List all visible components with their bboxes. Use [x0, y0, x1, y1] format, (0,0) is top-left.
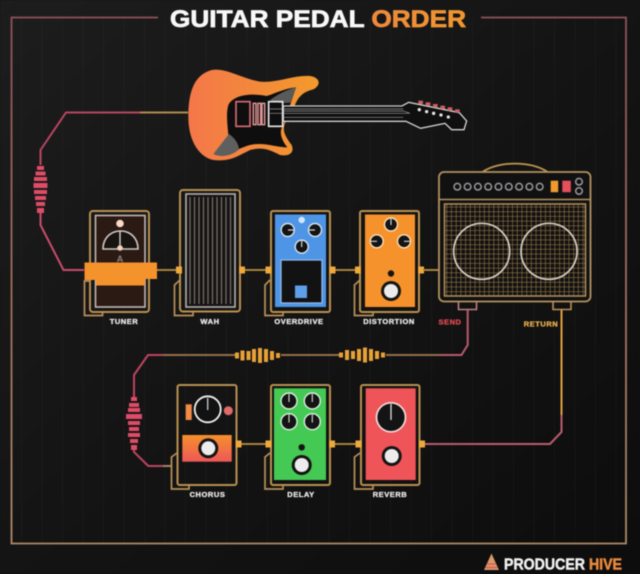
wah bracket — [174, 280, 193, 316]
distortion knob marks — [371, 219, 410, 241]
cable wave: guitar cable — [34, 166, 48, 213]
cable wave: send left — [235, 348, 280, 363]
amp control divider — [440, 198, 590, 200]
cable: reverb to return — [424, 310, 562, 444]
chorus knob mark — [207, 398, 209, 410]
tuner bracket — [84, 281, 102, 316]
pedal: wah — [174, 190, 240, 316]
tuner needle — [119, 231, 121, 248]
chorus knob — [195, 396, 221, 422]
connector: delay to reverb — [333, 443, 358, 445]
distortion knobs — [370, 218, 410, 248]
connector: wah to overdrive — [242, 269, 268, 271]
chorus led — [224, 406, 233, 415]
guitar plate top — [270, 87, 296, 103]
reverb casing — [361, 385, 420, 485]
connectors row two — [236, 440, 425, 448]
amp knobs — [454, 178, 582, 194]
delay body — [274, 388, 326, 480]
tuner led — [116, 220, 124, 227]
connectors row one — [176, 266, 424, 274]
reverb footswitch — [382, 446, 402, 466]
label: distortion: DISTORTION — [363, 317, 415, 326]
distortion footswitch — [381, 281, 401, 301]
label: reverb: REVERB — [373, 490, 407, 499]
delay knob marks — [289, 394, 312, 422]
logo icon — [484, 554, 499, 570]
chorus bracket — [172, 453, 189, 489]
wah ribs — [190, 197, 230, 304]
overdrive knob marks — [288, 230, 315, 247]
amplifier — [439, 164, 590, 310]
connector: chorus to delay — [240, 443, 268, 445]
delay casing — [271, 385, 330, 485]
amp send jack — [458, 302, 476, 310]
guitar pickups — [236, 102, 283, 126]
overdrive window — [281, 260, 322, 303]
connector: distortion to amp — [423, 269, 439, 271]
label: delay: DELAY — [287, 490, 315, 499]
amp orange switch — [551, 181, 558, 192]
guitar tuning pegs — [418, 101, 460, 119]
cable: guitar to tuner — [40, 112, 188, 270]
chorus casing — [178, 385, 236, 485]
overdrive casing — [271, 211, 330, 312]
amp speakers — [454, 223, 577, 279]
logo wordmark: PRODUCER HIVE — [504, 556, 622, 574]
amp handle — [483, 164, 547, 172]
pedal: reverb — [354, 385, 420, 489]
title: GUITAR PEDAL ORDER — [170, 6, 466, 33]
overdrive knobs — [281, 224, 322, 253]
cable wave: send right — [339, 348, 385, 362]
cable: send to chorus — [134, 310, 468, 466]
distortion bracket — [354, 280, 373, 316]
cable wave: chorus input — [126, 397, 142, 450]
delay hole — [298, 444, 305, 450]
reverb body — [366, 388, 416, 480]
tuner casing — [90, 211, 149, 312]
reverb knob mark — [390, 404, 392, 420]
reverb bracket — [354, 453, 373, 489]
tuner letter: A — [117, 254, 124, 264]
connector: tuner to wah — [157, 269, 178, 271]
delay bracket — [265, 453, 283, 489]
tuner orange band — [84, 262, 157, 286]
label: return: RETURN — [524, 320, 558, 328]
distortion body — [365, 214, 415, 307]
pedal: distortion — [354, 211, 419, 316]
wah casing — [180, 190, 240, 312]
label: wah: WAH — [200, 317, 220, 326]
chorus footswitch — [198, 438, 218, 458]
overdrive body — [275, 214, 326, 307]
pedal: chorus — [172, 385, 236, 489]
chorus gradient panel — [182, 435, 232, 462]
delay knobs — [281, 393, 320, 430]
amp grill — [444, 204, 586, 296]
overdrive led — [298, 217, 305, 223]
pedal: tuner — [84, 211, 157, 316]
label: chorus: CHORUS — [190, 490, 225, 499]
label: send: SEND — [438, 318, 462, 326]
amp cabinet — [439, 172, 590, 302]
amp return jack — [553, 302, 571, 310]
guitar neck — [283, 102, 467, 130]
label: tuner: TUNER — [110, 317, 138, 326]
guitar plate bottom — [213, 134, 239, 156]
overdrive bracket — [265, 280, 283, 316]
guitar — [188, 70, 467, 160]
pedal: overdrive — [265, 211, 330, 316]
tuner gauge — [103, 231, 138, 249]
tuner face — [96, 216, 145, 307]
tuner pivot — [117, 245, 123, 251]
distortion hole — [388, 270, 394, 277]
overdrive switch — [295, 286, 307, 298]
amp red switch — [562, 181, 571, 192]
reverb knob — [376, 403, 406, 432]
pedal: delay — [265, 385, 330, 489]
guitar pickguard — [227, 87, 296, 149]
delay footswitch — [292, 455, 312, 475]
logo — [484, 554, 622, 574]
guitar body — [188, 70, 319, 160]
guitar fretboard — [270, 109, 410, 117]
distortion casing — [360, 211, 419, 312]
label: overdrive: OVERDRIVE — [274, 317, 324, 326]
chorus orange slider — [186, 404, 192, 420]
wah footplate — [186, 194, 235, 307]
connector: overdrive to distortion — [332, 269, 358, 271]
